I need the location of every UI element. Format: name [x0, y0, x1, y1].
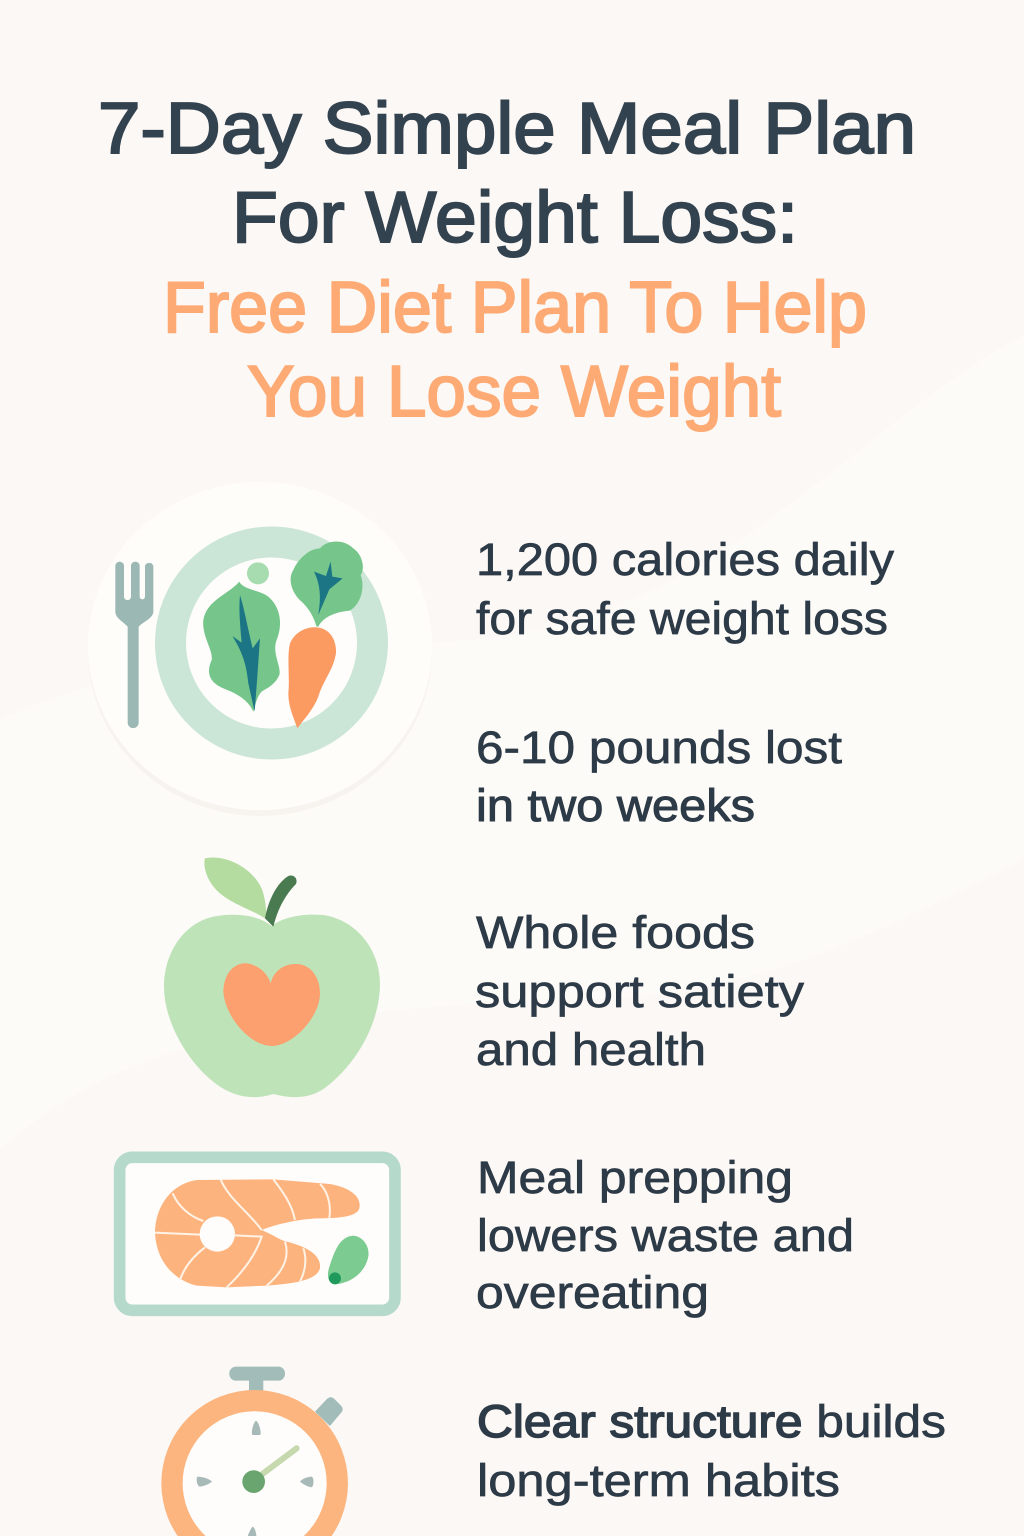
- icon: meal prep container with salmon: [120, 1157, 395, 1310]
- text: meal prepping: Meal prepping: [477, 1152, 793, 1203]
- vegetables: [203, 541, 363, 728]
- text: pounds lost: 6-10 pounds lost: [476, 722, 843, 773]
- subtitle line 2: You Lose Weight: [247, 352, 781, 432]
- text: whole foods: and health: [476, 1024, 706, 1075]
- text: meal prepping: overeating: [476, 1267, 709, 1318]
- fork: [115, 562, 153, 728]
- text: calories: [476, 534, 895, 644]
- text: clear structure: long-term habits: [477, 1455, 840, 1506]
- green garnish: [328, 1236, 369, 1284]
- text: whole foods: [475, 907, 805, 1075]
- icon: apple with heart: [164, 857, 380, 1097]
- subtitle line 1: Free Diet Plan To Help: [163, 268, 867, 348]
- title: [98, 89, 916, 432]
- icon: plate with vegetables and fork: [88, 482, 432, 816]
- text: calories: 1,200 calories daily: [476, 534, 895, 585]
- text: pounds lost: [476, 722, 843, 831]
- text: meal prepping: [476, 1152, 854, 1318]
- title line 1: 7-Day Simple Meal Plan: [98, 89, 916, 169]
- icon: stopwatch: [172, 1367, 343, 1536]
- text: meal prepping: lowers waste and: [477, 1210, 854, 1261]
- text: pounds lost: in two weeks: [476, 780, 755, 831]
- salmon: [155, 1179, 360, 1287]
- title line 2: For Weight Loss:: [232, 178, 798, 258]
- text: whole foods: support satiety: [475, 966, 805, 1017]
- text: clear structure: [477, 1396, 946, 1506]
- text: calories: for safe weight loss: [476, 593, 888, 644]
- text: whole foods: Whole foods: [476, 907, 755, 958]
- text: clear structure: Clear structure builds: [477, 1396, 946, 1447]
